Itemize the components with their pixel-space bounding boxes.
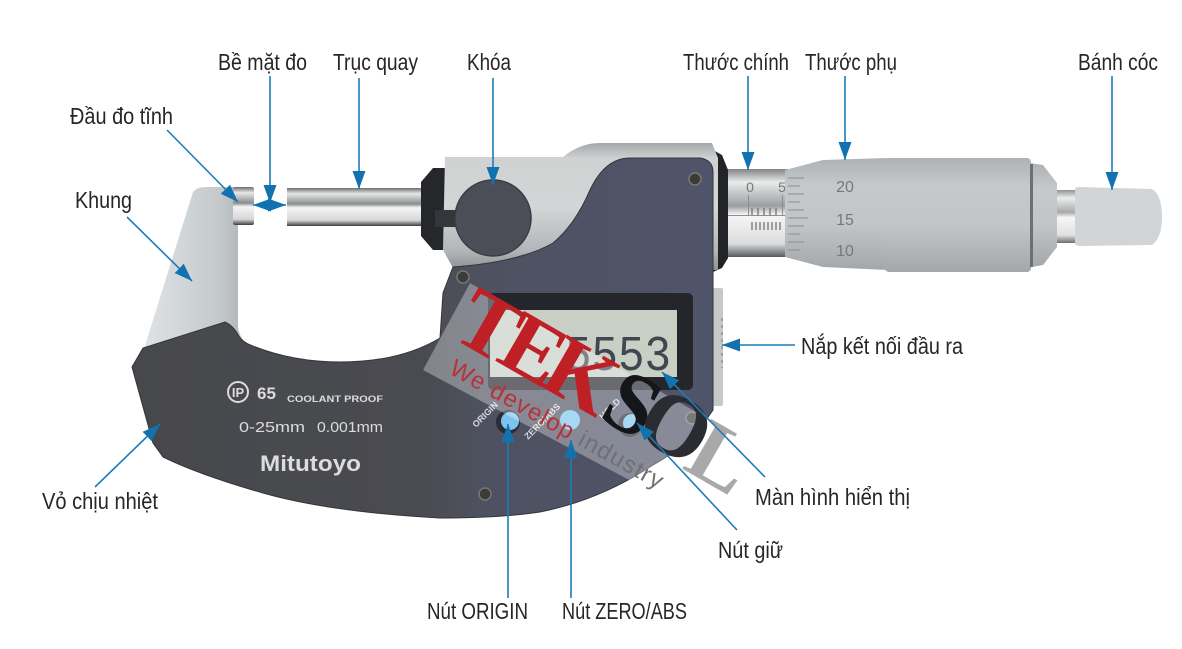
thimble: 15 [836,212,854,229]
thimble grip [885,158,1031,272]
display bezel [488,293,693,390]
label: Nút giữ: Nút giữ [718,537,783,563]
arrow: Nắp kết nối đầu ra [722,344,795,346]
sleeve with scale [722,169,788,257]
frame markings: IP [232,385,244,400]
dark ring [713,150,728,272]
arrow: Màn hình hiển thị [662,372,765,477]
frame markings: 0-25mm [239,419,305,436]
neck [1057,190,1075,243]
double arrow: measuring gap [253,204,286,206]
thimble [785,158,887,270]
arrow: Khóa [492,78,494,185]
label: Vỏ chịu nhiệt: Vỏ chịu nhiệt [42,488,159,514]
arrow: Nút ZERO/ABS [570,440,572,598]
LCD screen [490,310,677,377]
frame markings: COOLANT PROOF [287,394,384,404]
label: Khung: Khung [75,187,132,213]
LCD reading: 5553 [565,329,671,386]
sleeve with scale: 0 [746,179,754,195]
label: Khóa: Khóa [467,49,511,75]
watermark logo: T [439,269,538,383]
arrow: Bề mặt đo [269,76,271,203]
label: Đầu đo tĩnh: Đầu đo tĩnh [70,103,173,129]
label: Nút ZERO/ABS: Nút ZERO/ABS [562,598,687,624]
watermark logo: E [484,293,583,407]
watermark logo: S [587,350,678,459]
lock knob [435,180,531,256]
dark body [132,158,713,518]
arrow: Bánh cóc [1111,76,1113,190]
ratchet [1075,187,1162,246]
frame markings: 65 [257,384,276,403]
label: Thước chính: Thước chính [683,49,789,75]
frame markings: Mitutoyo [260,451,361,476]
sleeve with scale: 5 [778,179,786,195]
anvil [233,187,254,225]
watermark logo: O [622,367,730,486]
arrow: Trục quay [358,78,360,189]
silver upper housing [443,143,718,270]
buttons [470,396,642,441]
buttons: ZERO/ABS [522,401,562,441]
buttons: HOLD [597,396,623,421]
watermark band [423,283,735,482]
spindle [287,188,422,226]
watermark logo [439,269,770,515]
label: Trục quay: Trục quay [333,49,418,75]
label: Bánh cóc: Bánh cóc [1078,49,1158,75]
label: Bề mặt đo: Bề mặt đo [218,49,307,75]
thimble: 10 [836,243,854,260]
label: Nắp kết nối đầu ra: Nắp kết nối đầu ra [801,333,963,359]
watermark slogan: We develop industry [445,355,668,495]
screws [457,173,701,500]
dark collar [421,168,446,250]
label: Màn hình hiển thị: Màn hình hiển thị [755,484,910,510]
frame markings: 0.001mm [317,419,383,436]
arrow: Khung [127,217,192,281]
buttons: ORIGIN [470,400,500,429]
arrow: Đầu đo tĩnh [167,130,238,202]
frame markings [228,382,384,476]
arrow: Vỏ chịu nhiệt [95,424,160,487]
arrow: Thước chính [747,76,749,170]
watermark logo: K [527,317,635,436]
frame silver arm [143,187,252,352]
label: Nút ORIGIN: Nút ORIGIN [427,598,528,624]
output connector cap [712,288,723,406]
watermark logo: L [671,401,770,515]
flange [1030,163,1057,267]
arrow: Nút giữ [637,423,737,530]
micrometer [132,143,1162,518]
thimble: 20 [836,179,854,196]
arrow: Thước phụ [844,76,846,160]
label: Thước phụ: Thước phụ [805,49,897,75]
watermark: TEKSOL [423,269,770,515]
arrow: Nút ORIGIN [507,424,509,598]
